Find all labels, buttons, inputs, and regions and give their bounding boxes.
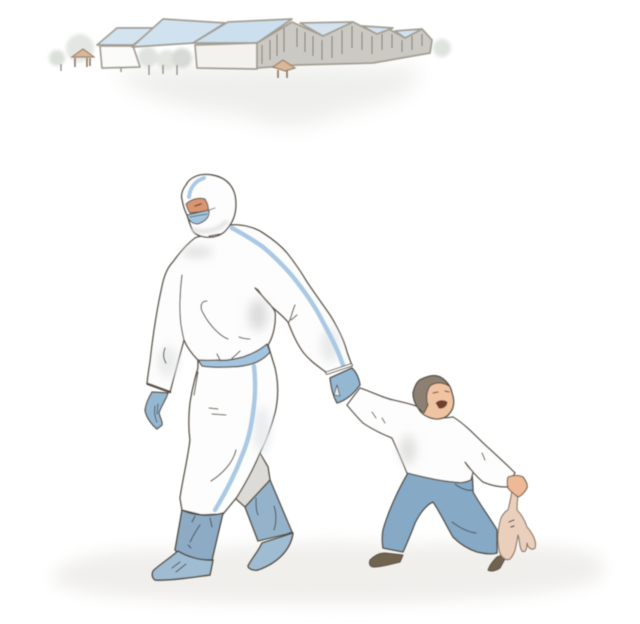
head hood bbox=[182, 174, 236, 237]
pavilion right bbox=[273, 60, 295, 78]
right shoe bbox=[488, 553, 508, 571]
hand bbox=[507, 476, 527, 497]
left white building bbox=[100, 46, 140, 68]
right glove bbox=[327, 365, 360, 403]
medical worker bbox=[145, 174, 360, 580]
waist belt bbox=[198, 344, 270, 367]
buildings bbox=[97, 19, 432, 69]
suit fold lines bbox=[164, 275, 297, 481]
left shoe bbox=[369, 553, 403, 567]
back boot bbox=[245, 480, 293, 570]
pavilion left bbox=[72, 49, 94, 67]
left glove bbox=[145, 384, 170, 429]
ground shadow bbox=[52, 543, 605, 604]
head bbox=[413, 376, 454, 419]
face bbox=[186, 198, 208, 213]
corrugated hall bbox=[257, 22, 432, 68]
main roof bbox=[193, 19, 292, 43]
suit body bbox=[147, 225, 352, 515]
left roof bbox=[97, 28, 155, 45]
front boot bbox=[152, 510, 223, 580]
tree trunks bbox=[61, 64, 177, 75]
suit shading bbox=[158, 247, 339, 454]
face mask bbox=[187, 208, 215, 224]
arm and leg stripes bbox=[215, 228, 343, 510]
ribs bbox=[262, 26, 422, 64]
back leg bbox=[235, 453, 270, 507]
child bbox=[347, 376, 536, 571]
hall roof panels bbox=[300, 22, 422, 38]
middle roof bbox=[132, 19, 225, 47]
toy rabbit bbox=[498, 491, 536, 560]
trousers bbox=[382, 473, 497, 554]
sweater bbox=[347, 388, 515, 487]
trees bbox=[49, 34, 451, 70]
fog beneath buildings bbox=[115, 65, 420, 126]
main wall bbox=[195, 43, 257, 69]
distant hospital scene bbox=[49, 19, 451, 126]
